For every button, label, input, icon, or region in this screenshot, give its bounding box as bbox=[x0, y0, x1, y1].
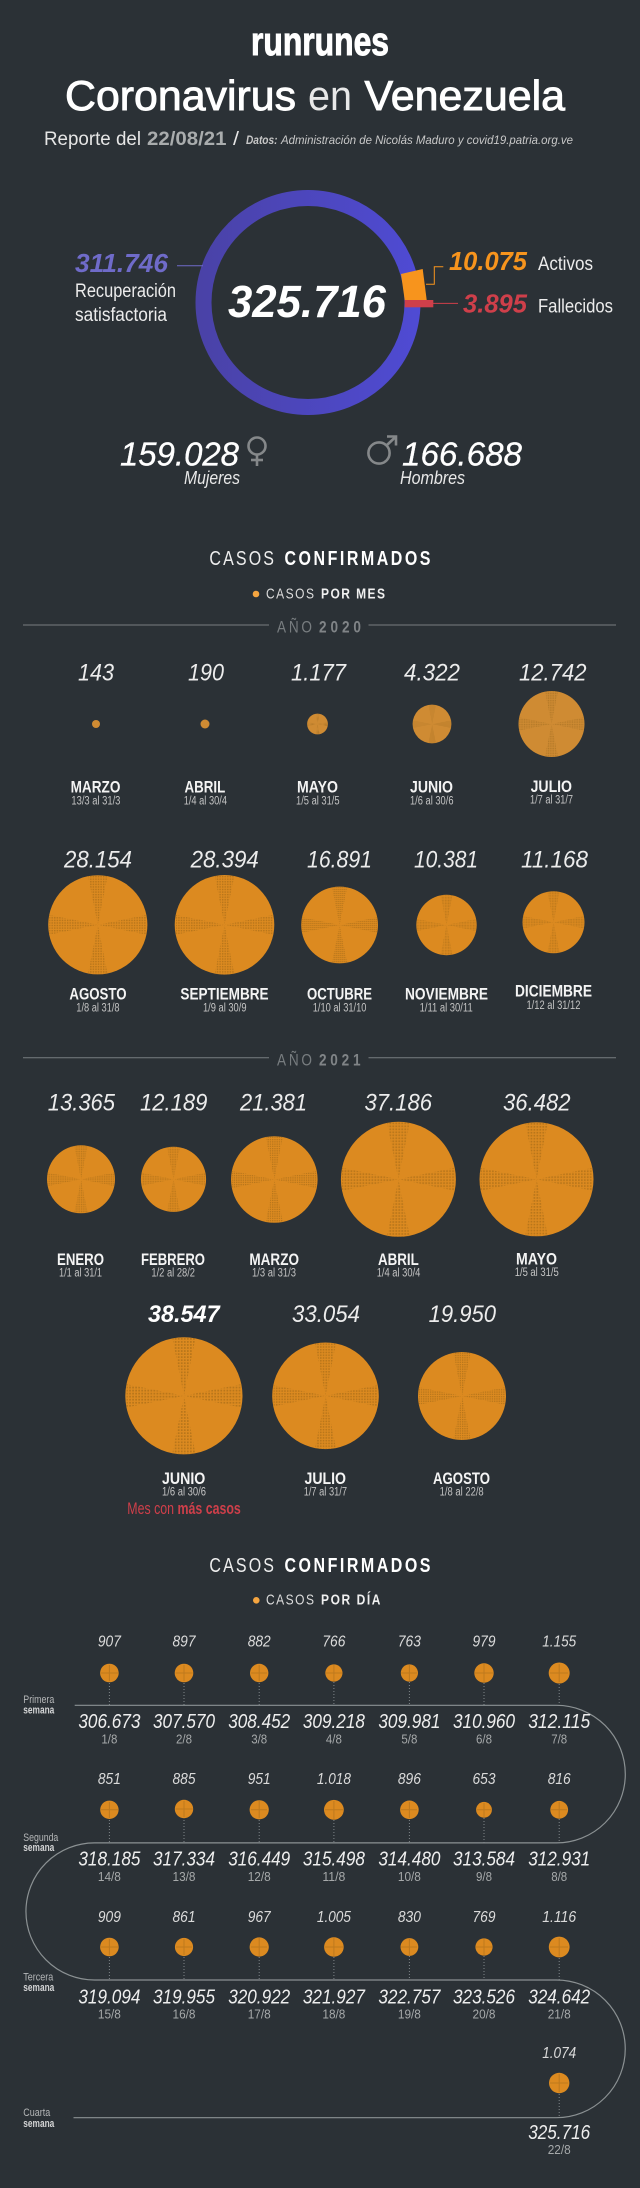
daily row: first week: 882 bbox=[248, 1634, 271, 1651]
legend: casos por mes: CASOS bbox=[266, 585, 314, 602]
month: febrero 2021: 12.189 bbox=[140, 1090, 207, 1117]
stat: women: Mujeres bbox=[184, 468, 240, 488]
month: agosto 2020: 28.154 bbox=[63, 847, 132, 874]
legend: casos por mes: POR MES bbox=[321, 585, 385, 602]
month: abril 2021 bbox=[341, 1090, 456, 1280]
heading: casos confirmados por mes bbox=[209, 547, 430, 569]
daily row: third week: 830 bbox=[398, 1909, 421, 1926]
daily row: second week bbox=[78, 1771, 590, 1884]
month: enero 2021: ENERO bbox=[57, 1250, 104, 1269]
daily row: second week: 951 bbox=[248, 1771, 271, 1788]
month: abril 2020: 1/4 al 30/4 bbox=[184, 795, 227, 807]
month: abril 2021: 1/4 al 30/4 bbox=[377, 1268, 421, 1280]
year divider: 2020: AÑO bbox=[277, 618, 312, 637]
daily row: third week: 769 bbox=[472, 1909, 496, 1926]
month: julio 2021: 33.054 bbox=[292, 1301, 360, 1328]
daily row: second week: 885 bbox=[172, 1771, 196, 1788]
month: febrero 2021: 1/2 al 28/2 bbox=[151, 1268, 195, 1280]
icon: female symbol bbox=[248, 438, 266, 466]
month: junio 2021 (highest): 38.547 bbox=[148, 1301, 221, 1328]
daily row: third week: 1.005 bbox=[317, 1909, 351, 1926]
month: marzo 2021 bbox=[231, 1090, 318, 1280]
year divider: 2021 bbox=[23, 1051, 616, 1070]
daily row: first week: 7/8 bbox=[551, 1731, 567, 1746]
month: julio 2021: 1/7 al 31/7 bbox=[304, 1487, 347, 1499]
month: marzo 2021: MARZO bbox=[249, 1250, 299, 1269]
month: febrero 2021: FEBRERO bbox=[141, 1250, 205, 1269]
daily row: second week: 1.018 bbox=[317, 1771, 351, 1788]
month: marzo 2021: 21.381 bbox=[239, 1090, 307, 1117]
callout: recovered: 311.746 bbox=[75, 248, 169, 278]
month: mayo 2021: 36.482 bbox=[503, 1090, 571, 1117]
daily row: second week: 315.498 bbox=[303, 1849, 365, 1871]
stat: men: 166.688 bbox=[402, 436, 523, 473]
daily row: first week: 309.981 bbox=[378, 1711, 440, 1733]
month: junio 2021 (highest): JUNIO bbox=[162, 1469, 205, 1488]
ring: recovered bbox=[204, 198, 412, 407]
subtitle: report date and data source: 22/08/21 bbox=[147, 129, 227, 150]
month: julio 2021: JULIO bbox=[304, 1469, 346, 1488]
week labels: Primera bbox=[23, 1694, 55, 1706]
daily row: first week: 2/8 bbox=[176, 1731, 192, 1746]
month: noviembre 2020: 1/11 al 30/11 bbox=[420, 1003, 473, 1015]
daily row: second week: 313.584 bbox=[453, 1849, 515, 1871]
month: julio 2020: 12.742 bbox=[519, 660, 586, 687]
daily row: first week: 308.452 bbox=[228, 1711, 290, 1733]
daily row: third week: 17/8 bbox=[248, 2006, 271, 2022]
month: agosto 2020: 1/8 al 31/8 bbox=[76, 1003, 120, 1015]
month: agosto 2021: 1/8 al 22/8 bbox=[440, 1487, 484, 1499]
month: junio 2020: JUNIO bbox=[410, 778, 453, 797]
legend: casos por mes bbox=[253, 585, 385, 602]
title: Venezuela bbox=[364, 72, 566, 119]
daily row: third week bbox=[78, 1909, 590, 2022]
daily row: first week: 309.218 bbox=[303, 1711, 365, 1733]
daily row: first week: 907 bbox=[98, 1634, 122, 1651]
month: diciembre 2020: 1/12 al 31/12 bbox=[526, 1000, 580, 1012]
month: julio 2020: JULIO bbox=[531, 777, 572, 796]
daily row: second week: 317.334 bbox=[153, 1849, 215, 1871]
daily row: third week: 320.922 bbox=[228, 1987, 290, 2009]
timeline serpentine line bbox=[26, 1705, 625, 2118]
month: marzo 2020 bbox=[71, 660, 120, 807]
subtitle: report date and data source bbox=[44, 129, 573, 150]
week labels: Cuarta bbox=[23, 2107, 51, 2119]
year divider: 2020 bbox=[23, 618, 616, 637]
callout: recovered: Recuperación bbox=[75, 281, 176, 302]
month: enero 2021 bbox=[47, 1090, 116, 1280]
daily row: first week: 312.115 bbox=[528, 1711, 591, 1733]
daily row: third week: 16/8 bbox=[172, 2006, 196, 2022]
segment: active cases bbox=[401, 269, 427, 300]
month: septiembre 2020 bbox=[175, 847, 274, 1015]
callout: deaths bbox=[433, 289, 613, 319]
daily row: third week: 324.642 bbox=[528, 1987, 590, 2009]
daily row: second week: 9/8 bbox=[476, 1869, 492, 1884]
month: abril 2021: 37.186 bbox=[364, 1090, 433, 1117]
month: junio 2020 bbox=[404, 660, 460, 807]
stat: men: Hombres bbox=[400, 468, 465, 488]
daily row: second week: 316.449 bbox=[228, 1849, 290, 1871]
month: octubre 2020: 1/10 al 31/10 bbox=[313, 1003, 366, 1015]
callout: active: 10.075 bbox=[449, 246, 528, 276]
daily row: third week: 20/8 bbox=[472, 2006, 496, 2022]
daily row: first week: 307.570 bbox=[153, 1711, 215, 1733]
month: marzo 2020: 13/3 al 31/3 bbox=[71, 795, 120, 807]
month: abril 2020: ABRIL bbox=[184, 778, 225, 797]
month: mayo 2020: 1/5 al 31/5 bbox=[296, 795, 340, 807]
month: abril 2020 bbox=[184, 660, 227, 807]
daily row: third week: 909 bbox=[98, 1909, 121, 1926]
month: septiembre 2020: 28.394 bbox=[190, 847, 259, 874]
daily row: third week: 323.526 bbox=[453, 1987, 516, 2009]
daily row: second week: 653 bbox=[472, 1771, 496, 1788]
icon: male symbol bbox=[368, 436, 396, 464]
daily row: first week: 310.960 bbox=[453, 1711, 515, 1733]
month: noviembre 2020: 10.381 bbox=[414, 847, 478, 874]
month: julio 2020: 1/7 al 31/7 bbox=[530, 795, 573, 807]
month: agosto 2021 bbox=[418, 1301, 506, 1499]
callout: active bbox=[426, 246, 593, 284]
title: en bbox=[308, 72, 352, 119]
daily row: third week: 319.094 bbox=[78, 1987, 140, 2009]
month: julio 2021 bbox=[272, 1301, 379, 1499]
month: marzo 2020: MARZO bbox=[71, 778, 120, 797]
title: Coronavirus bbox=[65, 72, 296, 119]
month: febrero 2021 bbox=[140, 1090, 207, 1280]
daily row: second week: 896 bbox=[398, 1771, 421, 1788]
callout: active: Activos bbox=[538, 254, 593, 275]
daily row: second week: 12/8 bbox=[248, 1869, 271, 1884]
daily row: third week: 861 bbox=[172, 1909, 196, 1926]
week labels: semana bbox=[23, 2118, 55, 2130]
month: mayo 2020: MAYO bbox=[297, 778, 338, 797]
daily row: third week: 1.116 bbox=[542, 1909, 576, 1926]
daily row: fourth week: 325.716 bbox=[528, 2122, 591, 2144]
month: agosto 2020 bbox=[48, 847, 147, 1015]
daily row: first week: 763 bbox=[398, 1634, 421, 1651]
month: septiembre 2020: 1/9 al 30/9 bbox=[203, 1003, 246, 1015]
month: mayo 2021: 1/5 al 31/5 bbox=[515, 1267, 559, 1279]
legend: casos por dia: CASOS bbox=[266, 1591, 314, 1608]
daily row: second week: 14/8 bbox=[98, 1869, 121, 1884]
month: noviembre 2020 bbox=[405, 847, 488, 1015]
month: octubre 2020 bbox=[301, 847, 378, 1015]
month: enero 2021: 1/1 al 31/1 bbox=[59, 1268, 102, 1280]
month: agosto 2021: 19.950 bbox=[429, 1301, 497, 1328]
week labels: semana bbox=[23, 1982, 55, 1994]
logo: runrunes: runrunes bbox=[251, 20, 389, 64]
daily row: fourth week bbox=[528, 2045, 591, 2157]
daily row: first week: 1/8 bbox=[101, 1731, 117, 1746]
daily row: third week: 319.955 bbox=[153, 1987, 216, 2009]
week labels bbox=[23, 1694, 59, 2130]
subtitle: report date and data source: / bbox=[233, 129, 240, 150]
year divider: 2020: 2020 bbox=[319, 618, 361, 637]
heading: casos confirmados por dia bbox=[209, 1554, 430, 1576]
subtitle: report date and data source: Datos: bbox=[246, 133, 278, 147]
month: noviembre 2020: NOVIEMBRE bbox=[405, 984, 488, 1003]
total number: 325.716 bbox=[228, 276, 387, 327]
month: diciembre 2020: DICIEMBRE bbox=[515, 982, 592, 1001]
legend: casos por dia: POR DÍA bbox=[321, 1591, 381, 1608]
stat: women bbox=[120, 436, 266, 488]
callout: month with most cases: Mes con más casos bbox=[127, 1499, 241, 1518]
month: junio 2020: 4.322 bbox=[404, 660, 460, 687]
daily row: third week: 322.757 bbox=[378, 1987, 441, 2009]
daily row: third week: 21/8 bbox=[548, 2006, 571, 2022]
daily row: first week: 4/8 bbox=[326, 1731, 342, 1746]
daily row: first week: 3/8 bbox=[251, 1731, 267, 1746]
month: mayo 2020: 1.177 bbox=[291, 660, 348, 687]
daily row: third week: 18/8 bbox=[322, 2006, 345, 2022]
daily row: first week bbox=[78, 1634, 591, 1746]
month: junio 2021 (highest): 1/6 al 30/6 bbox=[162, 1487, 206, 1499]
month: agosto 2020: AGOSTO bbox=[69, 984, 126, 1003]
month: octubre 2020: 16.891 bbox=[307, 847, 372, 874]
daily row: first week: 979 bbox=[472, 1634, 496, 1651]
daily row: second week: 851 bbox=[98, 1771, 121, 1788]
week labels: semana bbox=[23, 1705, 55, 1717]
month: junio 2020: 1/6 al 30/6 bbox=[410, 795, 454, 807]
subtitle: report date and data source: Administración de Nicolás Maduro y covid19.patria.org.ve bbox=[280, 133, 573, 147]
month: mayo 2020 bbox=[291, 660, 348, 807]
week labels: semana bbox=[23, 1842, 55, 1854]
callout: deaths: Fallecidos bbox=[538, 297, 613, 318]
month: junio 2021 (highest) bbox=[125, 1301, 242, 1518]
daily row: second week: 816 bbox=[548, 1771, 571, 1788]
daily row: third week: 19/8 bbox=[398, 2006, 421, 2022]
stat: women: 159.028 bbox=[120, 436, 240, 473]
daily row: fourth week: 22/8 bbox=[548, 2142, 571, 2157]
donut chart: total cases bbox=[204, 198, 433, 407]
title bbox=[65, 72, 566, 119]
heading: casos confirmados por mes: CONFIRMADOS bbox=[284, 547, 431, 569]
daily row: second week: 10/8 bbox=[398, 1869, 421, 1884]
year divider: 2021: AÑO bbox=[277, 1051, 312, 1070]
daily row: third week: 321.927 bbox=[303, 1987, 366, 2009]
month: diciembre 2020 bbox=[515, 847, 592, 1012]
month: abril 2021: ABRIL bbox=[378, 1250, 419, 1269]
month: marzo 2021: 1/3 al 31/3 bbox=[252, 1268, 296, 1280]
daily row: first week: 306.673 bbox=[78, 1711, 140, 1733]
heading: casos confirmados por dia: CONFIRMADOS bbox=[284, 1554, 431, 1576]
daily row: second week: 318.185 bbox=[78, 1849, 141, 1871]
callout: recovered bbox=[75, 248, 203, 326]
daily row: third week: 15/8 bbox=[98, 2006, 121, 2022]
daily row: first week: 6/8 bbox=[476, 1731, 492, 1746]
week labels: Tercera bbox=[23, 1972, 54, 1984]
month: mayo 2021 bbox=[480, 1090, 594, 1279]
daily row: first week: 897 bbox=[172, 1634, 196, 1651]
month: marzo 2020: 143 bbox=[78, 660, 115, 687]
month: diciembre 2020: 11.168 bbox=[521, 847, 589, 874]
month: enero 2021: 13.365 bbox=[48, 1090, 116, 1117]
year divider: 2021: 2021 bbox=[319, 1051, 361, 1070]
month: septiembre 2020: SEPTIEMBRE bbox=[180, 984, 269, 1003]
daily row: first week: 1.155 bbox=[542, 1634, 576, 1651]
segment: deaths bbox=[405, 300, 433, 307]
month: julio 2020 bbox=[518, 660, 586, 807]
daily row: first week: 766 bbox=[322, 1634, 345, 1651]
heading: casos confirmados por dia: CASOS bbox=[209, 1554, 274, 1576]
daily row: fourth week: 1.074 bbox=[542, 2045, 576, 2062]
daily row: second week: 312.931 bbox=[528, 1849, 590, 1871]
daily row: second week: 13/8 bbox=[172, 1869, 196, 1884]
month: mayo 2021: MAYO bbox=[516, 1249, 557, 1268]
daily row: second week: 314.480 bbox=[378, 1849, 440, 1871]
callout: deaths: 3.895 bbox=[463, 289, 528, 319]
month: octubre 2020: OCTUBRE bbox=[307, 984, 372, 1003]
daily row: first week: 5/8 bbox=[401, 1731, 417, 1746]
subtitle: report date and data source: Reporte del bbox=[44, 129, 141, 150]
callout: recovered: satisfactoria bbox=[75, 305, 167, 326]
week labels: Segunda bbox=[23, 1832, 59, 1844]
legend: casos por dia bbox=[253, 1591, 381, 1608]
daily row: second week: 11/8 bbox=[322, 1869, 345, 1884]
month: agosto 2021: AGOSTO bbox=[433, 1469, 490, 1488]
daily row: third week: 967 bbox=[248, 1909, 272, 1926]
daily row: second week: 8/8 bbox=[551, 1869, 567, 1884]
month: abril 2020: 190 bbox=[188, 660, 225, 687]
heading: casos confirmados por mes: CASOS bbox=[209, 547, 274, 569]
stat: men bbox=[368, 436, 523, 488]
